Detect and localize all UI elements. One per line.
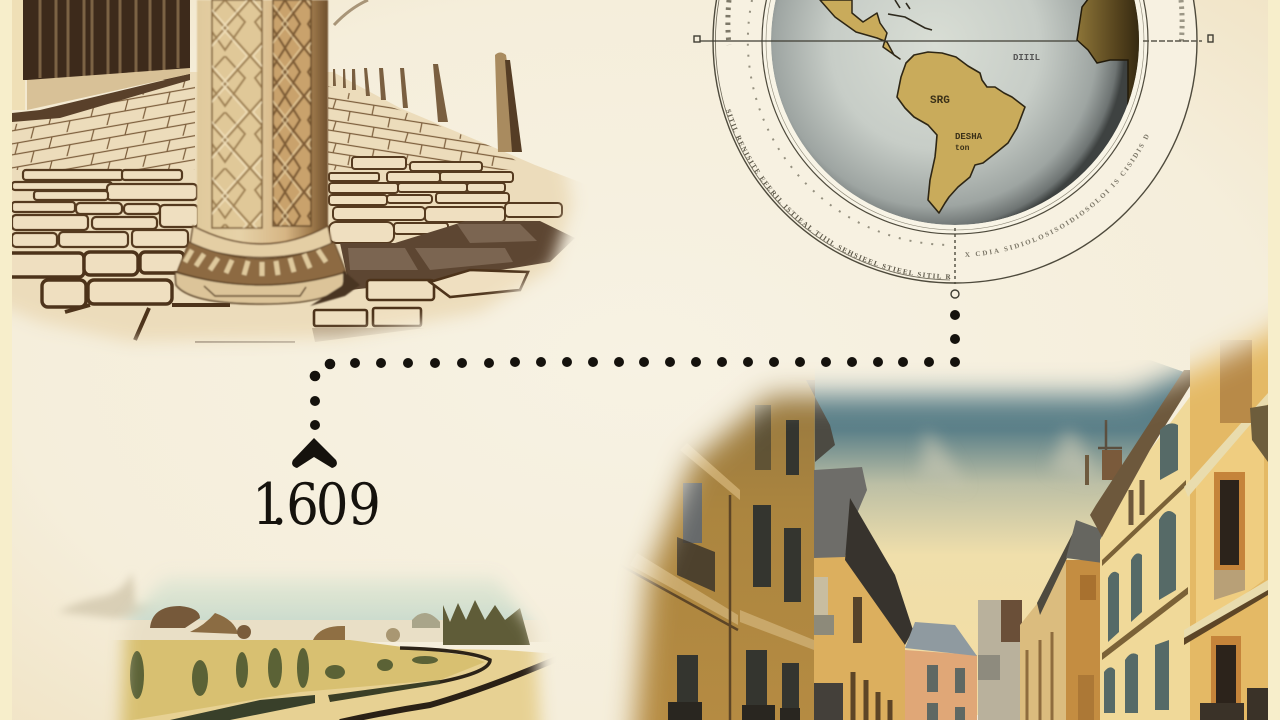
globe labels [930,53,1040,153]
column base [175,226,360,306]
globe sphere [771,0,1150,225]
pavement base [12,72,577,348]
right cobblestones [329,157,562,243]
ring inscriptions: X CDIA SIDIOLOSISOIDIOSOLOI IS CISIDIS DIOS [965,134,1148,257]
bollards [333,52,522,152]
distant hills and haystacks [118,606,542,642]
dotted connector path [310,310,960,430]
globe labels: ton [955,144,970,153]
equator line [700,40,1202,42]
globe labels: DESHA [955,132,983,142]
sky band [124,576,536,620]
illustration: old city street [613,311,1268,720]
arrowhead [292,438,337,468]
South America [897,52,1025,213]
Caribbean islands [888,0,932,30]
building: mansard corner [814,467,913,720]
column shaft [190,0,330,252]
right tree line [443,600,530,645]
building: left large ochre [613,374,835,720]
Central America [820,0,900,59]
distant buildings [978,534,1072,720]
hedgerows [130,648,440,720]
ring inscriptions: SITIL RENISITE EFERIL ISTIEAL TIIIL SEHSIEEL STIEEL SITIL RENIS [726,109,951,279]
column shadow on pavement [340,221,575,290]
road [133,649,550,720]
yellow field [110,640,485,720]
smudged cloud [62,576,144,620]
globe labels: DIIIL [1013,53,1040,63]
upper cobbles [12,81,516,170]
ring inscriptions [726,109,1148,279]
building behind column [12,0,190,122]
building: far right yellow [1184,311,1268,720]
illustration: carved column on cobblestone street [12,0,577,348]
large cobblestones [12,170,198,247]
ring markers [694,35,1213,298]
distance value: 1.609 [252,471,381,538]
globe with graduated rings [693,0,1214,299]
sky [800,360,1184,715]
Africa [1076,0,1139,106]
orange tower with spires [1066,420,1122,720]
meridian tick [954,228,956,284]
building: pink facade [905,622,977,720]
globe labels: SRG [930,95,950,107]
building: cream facade [1090,370,1200,720]
outer ring [713,0,1197,283]
illustration: landscape with winding road [62,576,550,720]
